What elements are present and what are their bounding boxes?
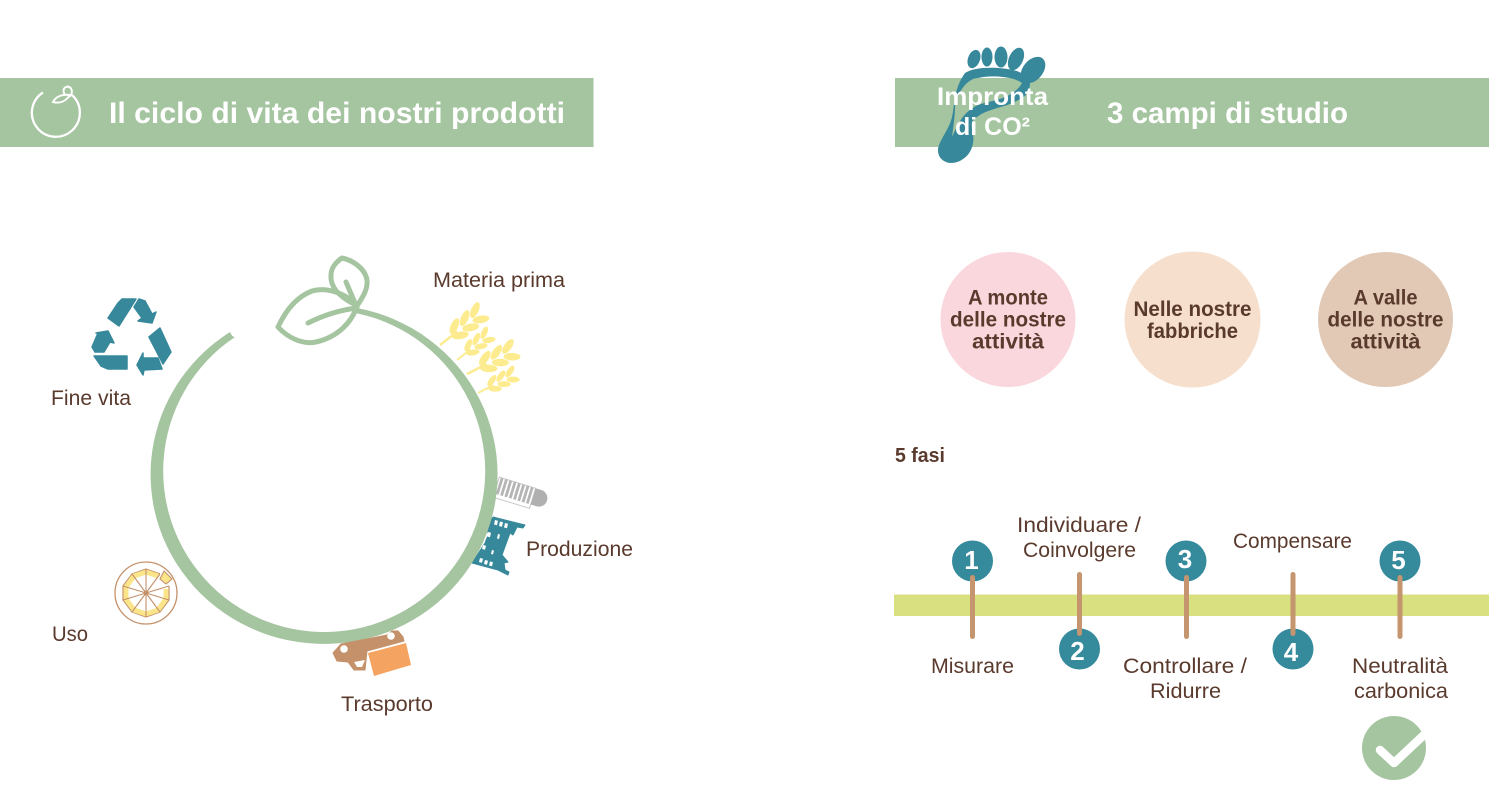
step 3	[1123, 540, 1247, 703]
icon: check mark	[1362, 716, 1426, 780]
icon: truck	[333, 631, 411, 676]
heading text: impronta di CO2: Impronta	[937, 83, 1049, 111]
circle: a valle	[1318, 252, 1453, 387]
icon: recycle	[92, 299, 171, 375]
step 2	[1017, 514, 1141, 670]
step 2: Individuare /	[1017, 514, 1141, 537]
heading text: impronta di CO2	[937, 83, 1049, 141]
step 5: Neutralità	[1352, 655, 1448, 678]
heading text: 3 campi di studio: 3 campi di studio	[1107, 97, 1348, 130]
label: materia prima: Materia prima	[433, 269, 565, 292]
step 5: carbonica	[1354, 680, 1448, 703]
step 5	[1352, 540, 1448, 703]
timeline band	[894, 594, 1489, 616]
step 1	[931, 540, 1014, 678]
icon: footprint	[938, 45, 1050, 163]
step 4: 4	[1284, 637, 1299, 667]
step 4	[1233, 530, 1352, 670]
step 3: Ridurre	[1150, 680, 1221, 703]
step 2: 2	[1070, 636, 1085, 666]
heading bar: carbon footprint	[895, 45, 1489, 163]
icon: factory building	[472, 517, 525, 575]
circle: a monte: A monte	[968, 286, 1048, 310]
circle: a monte: delle nostre	[950, 308, 1066, 332]
step 1: 1	[964, 545, 979, 575]
circle: nelle nostre fabbriche: fabbriche	[1147, 320, 1238, 343]
label: fine vita: Fine vita	[51, 387, 131, 410]
circle: nelle nostre fabbriche	[1124, 252, 1260, 388]
panel: life cycle	[0, 78, 633, 716]
circle: a valle: A valle	[1354, 286, 1418, 310]
icon: wheat	[432, 299, 525, 402]
circle: a valle: attività	[1350, 330, 1421, 354]
step 1: Misurare	[931, 655, 1014, 678]
heading text: impronta di CO2: di CO²	[955, 113, 1030, 141]
subheading: 5 fasi: 5 fasi	[895, 445, 945, 467]
panel: carbon footprint	[894, 45, 1489, 780]
step 3: 3	[1178, 544, 1192, 574]
label: uso: Uso	[52, 623, 88, 646]
label: trasporto: Trasporto	[341, 693, 433, 716]
step 2: Coinvolgere	[1023, 539, 1136, 562]
heading text: Il ciclo di vita dei nostri prodotti	[109, 97, 565, 130]
step 4: Compensare	[1233, 530, 1352, 553]
step 5: 5	[1391, 545, 1406, 575]
icon: apple	[32, 86, 80, 137]
circle: a monte	[940, 252, 1076, 387]
label: produzione: Produzione	[526, 538, 633, 561]
circle: nelle nostre fabbriche: Nelle nostre	[1134, 298, 1252, 321]
icon: wheel	[115, 562, 177, 624]
icon: factory machine	[493, 477, 550, 513]
life cycle ring	[151, 258, 498, 644]
step 3: Controllare /	[1123, 655, 1247, 678]
heading bar: life cycle	[0, 78, 594, 147]
icon: sprout leaves	[278, 258, 367, 343]
circle: a monte: attività	[972, 330, 1044, 354]
circle: a valle: delle nostre	[1328, 308, 1444, 332]
